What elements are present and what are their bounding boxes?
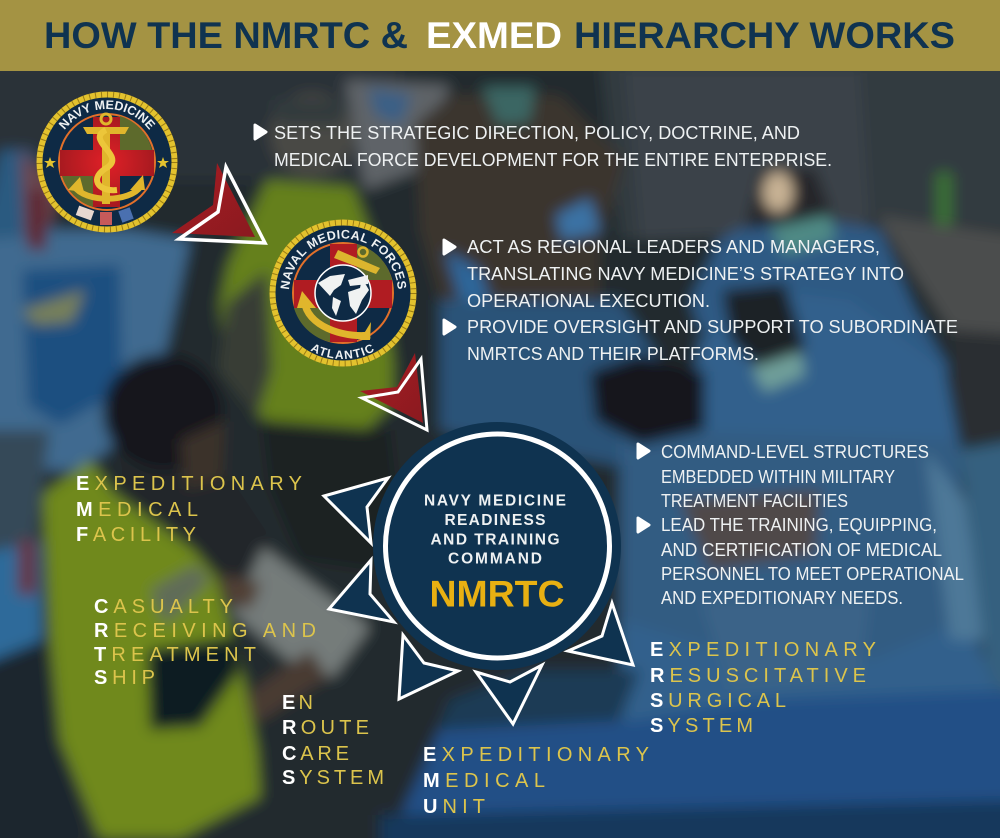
label: ERSS: SURGICAL xyxy=(650,690,786,712)
label: ERCS xyxy=(282,692,384,789)
title text: HOW THE NMRTC & xyxy=(44,15,408,56)
arrow: to CRTS xyxy=(329,560,394,622)
NMRTC full name: COMMAND xyxy=(448,550,542,568)
bullet xyxy=(444,320,455,334)
bullet xyxy=(255,125,266,139)
label: EMF xyxy=(76,473,302,546)
badge: Naval Medical Forces Atlantic: ATLANTIC xyxy=(310,344,374,359)
badge: Navy Medicine: NAVY MEDICINE xyxy=(58,100,156,130)
NMRTC acronym: NMRTC xyxy=(430,574,564,614)
text block: NMRTC role: AND CERTIFICATION OF MEDICAL xyxy=(661,539,942,560)
text block: Navy Medicine role: SETS THE STRATEGIC DIRECTION, POLICY, DOCTRINE, AND xyxy=(274,122,800,143)
label: CRTS: T REATMENT xyxy=(94,644,256,666)
NMRTC full name: NAVY MEDICINE xyxy=(424,492,566,510)
arrow: to EMU xyxy=(476,665,542,724)
label: CRTS xyxy=(94,596,316,689)
NMRTC full name xyxy=(424,492,566,568)
text block: NMRTC role: LEAD THE TRAINING, EQUIPPING, xyxy=(661,514,937,535)
label: ERSS: RESUSCITATIVE xyxy=(650,665,866,687)
label: EMF: E XPEDITIONARY xyxy=(76,473,302,495)
badge: Navy Medicine xyxy=(36,92,178,232)
text block: Naval Medical Forces role: PROVIDE OVERSIGHT AND SUPPORT TO SUBORDINATE xyxy=(467,316,958,337)
text block: Naval Medical Forces role: OPERATIONAL EXECUTION. xyxy=(467,290,710,311)
text block: Naval Medical Forces role: ACT AS REGIONAL LEADERS AND MANAGERS, xyxy=(467,236,880,257)
bullet xyxy=(444,240,455,254)
arrow: to ERCS xyxy=(399,635,458,699)
label: ERCS: ROUTE xyxy=(282,717,369,739)
title band xyxy=(0,0,1000,71)
text block: Naval Medical Forces role: TRANSLATING NAVY MEDICINE’S STRATEGY INTO xyxy=(467,263,904,284)
text block: NMRTC role: PERSONNEL TO MEET OPERATIONAL xyxy=(661,563,964,584)
arrow: to EMF xyxy=(324,478,388,543)
text block: Naval Medical Forces role: NMRTCS AND THEIR PLATFORMS. xyxy=(467,343,759,364)
label: EMF: M EDICAL xyxy=(76,499,198,521)
title text xyxy=(44,15,955,56)
bullet xyxy=(638,444,649,458)
bullet xyxy=(638,518,649,532)
NMRTC central circle xyxy=(373,422,621,670)
title text: EXMED xyxy=(426,15,562,56)
text block: Navy Medicine role xyxy=(255,122,832,170)
NMRTC full name: READINESS xyxy=(444,512,546,529)
label: ERSS: SYSTEM xyxy=(650,715,753,737)
label: CRTS: R ECEIVING AND xyxy=(94,620,316,642)
label: CRTS: SHIP xyxy=(94,667,155,689)
text block: Naval Medical Forces role xyxy=(444,236,958,364)
label: ERSS xyxy=(650,639,876,737)
title text: HIERARCHY WORKS xyxy=(574,15,955,56)
label: EMU: E XPEDITIONARY xyxy=(423,744,649,766)
badge: Naval Medical Forces Atlantic xyxy=(270,220,416,366)
label: CRTS: CASUALTY xyxy=(94,596,233,618)
badge: Naval Medical Forces Atlantic: NAVAL MEDICAL FORCES xyxy=(280,230,406,290)
text block: NMRTC role: TREATMENT FACILITIES xyxy=(661,490,848,511)
label: EMU: U NIT xyxy=(423,796,485,818)
arrow: Naval Medical Forces to NMRTC xyxy=(360,353,427,430)
text block: NMRTC role: AND EXPEDITIONARY NEEDS. xyxy=(661,587,903,608)
label: ERCS: SYSTEM xyxy=(282,767,384,789)
label: ERCS: EN xyxy=(282,692,313,714)
arrow: Navy Medicine to Naval Medical Forces xyxy=(172,163,265,243)
text block: Navy Medicine role: MEDICAL FORCE DEVELOPMENT FOR THE ENTIRE ENTERPRISE. xyxy=(274,149,832,170)
label: ERCS: CARE xyxy=(282,743,349,765)
text block: NMRTC role: COMMAND-LEVEL STRUCTURES xyxy=(661,441,929,462)
label: EMU xyxy=(423,744,649,818)
NMRTC full name: AND TRAINING xyxy=(430,532,560,548)
arrow: to ERSS xyxy=(568,603,633,665)
label: EMU: M EDICAL xyxy=(423,770,545,792)
label: EMF: FACILITY xyxy=(76,524,196,546)
text block: NMRTC role: EMBEDDED WITHIN MILITARY xyxy=(661,466,895,487)
label: ERSS: E XPEDITIONARY xyxy=(650,639,876,661)
text block: NMRTC role xyxy=(638,441,964,608)
